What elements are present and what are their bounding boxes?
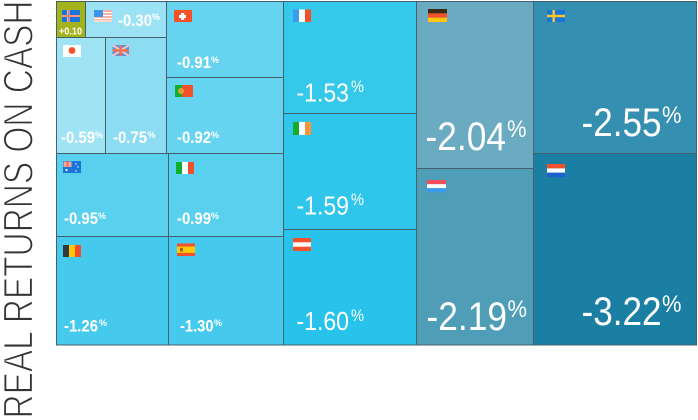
flag: Iceland <box>62 10 80 22</box>
panel: Portugal <box>166 78 284 154</box>
treemap <box>56 2 696 345</box>
value: -0.30%: % <box>152 12 161 23</box>
value: -2.04%: -2.04 <box>426 115 506 159</box>
value: -2.19%: -2.19 <box>426 295 507 339</box>
value: -2.19%: % <box>508 296 527 323</box>
panel: Austria <box>284 230 416 345</box>
value: -1.59%: % <box>351 191 364 209</box>
flag: Luxembourg <box>427 180 446 192</box>
value: -2.04%: % <box>507 116 526 143</box>
panel: Ireland <box>284 114 416 230</box>
value: -1.30%: -1.30 <box>180 318 214 336</box>
flag: Switzerland <box>174 10 192 22</box>
value: -3.22%: % <box>662 291 682 318</box>
value: -1.59%: -1.59 <box>296 190 349 220</box>
flag: Spain <box>177 244 195 256</box>
panel: United States <box>86 2 166 38</box>
panel: Belgium <box>56 236 168 345</box>
panel: Netherlands <box>534 154 696 345</box>
value: -0.91%: % <box>211 55 220 66</box>
flag: Japan <box>63 45 81 57</box>
value: -1.60%: % <box>351 307 364 325</box>
flag: Australia <box>63 161 81 173</box>
value: -0.59%: -0.59 <box>61 129 95 147</box>
value: -0.75%: % <box>148 130 156 141</box>
value: -1.60%: -1.60 <box>296 306 349 336</box>
value: -3.22%: -3.22 <box>582 290 662 334</box>
value: -0.92%: -0.92 <box>177 129 211 147</box>
panel: Australia <box>56 154 168 236</box>
value: -1.26%: % <box>99 318 108 329</box>
flag: Ireland <box>293 122 311 135</box>
value: -1.30%: % <box>214 318 223 329</box>
value: -0.95%: -0.95 <box>64 210 98 228</box>
value: -0.92%: % <box>211 130 220 141</box>
panel: Italy <box>168 154 284 236</box>
flag: Germany <box>428 9 447 22</box>
value: -1.26%: -1.26 <box>64 318 98 336</box>
panel: Switzerland <box>166 2 284 78</box>
panel: France <box>284 2 416 114</box>
value: -0.59%: % <box>95 130 104 141</box>
panel: Sweden <box>534 2 696 154</box>
value: -1.53%: -1.53 <box>296 78 349 108</box>
flag: United Kingdom <box>112 45 129 56</box>
value: -2.55%: -2.55 <box>582 101 662 145</box>
flag: United States <box>94 10 112 22</box>
value: -0.91%: -0.91 <box>177 54 211 72</box>
flag: Belgium <box>63 245 81 257</box>
flag: Sweden <box>547 10 565 22</box>
value: -1.53%: % <box>351 78 364 96</box>
flag: France <box>293 10 311 22</box>
flag: Netherlands <box>547 164 565 177</box>
value: -0.99%: % <box>211 211 220 222</box>
panel: Germany <box>416 2 534 168</box>
value: -2.55%: % <box>662 102 682 129</box>
panel: United Kingdom <box>106 38 166 154</box>
value: -0.75%: -0.75 <box>113 129 147 147</box>
value: +0.10: +0.10 <box>59 26 82 38</box>
panel: Luxembourg <box>416 168 534 345</box>
panel: Spain <box>168 236 284 345</box>
value: -0.95%: % <box>98 211 107 222</box>
flag: Italy <box>176 162 194 174</box>
value: -0.30%: -0.30 <box>118 12 152 30</box>
flag: Portugal <box>175 85 193 97</box>
panel: Iceland <box>56 2 86 38</box>
value: -0.99%: -0.99 <box>177 210 211 228</box>
flag: Austria <box>293 238 311 251</box>
panel: Japan <box>56 38 106 154</box>
